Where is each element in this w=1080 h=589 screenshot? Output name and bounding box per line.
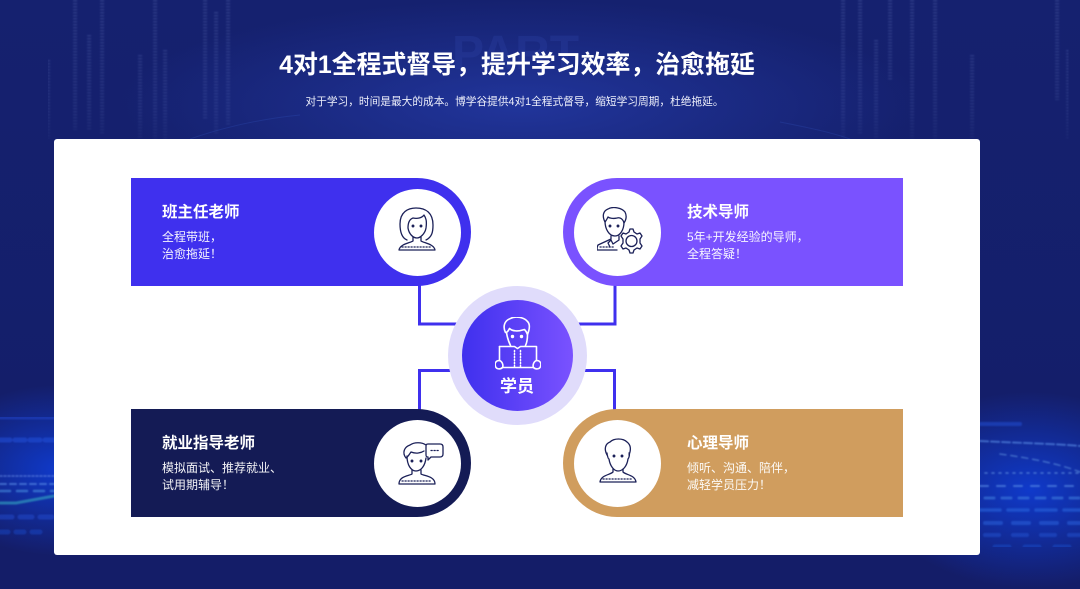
label: 学员: 学员 bbox=[500, 376, 534, 396]
text: 就业指导老师 description bbox=[162, 461, 282, 492]
icon: student reading a book bbox=[495, 317, 541, 370]
text: 技术导师 description: 5年+开发经验的导师， bbox=[687, 230, 809, 244]
heading: 技术导师: 技术导师 bbox=[687, 204, 749, 221]
card: 心理导师 bbox=[563, 409, 903, 517]
icon: man with speech bubble in white circle bbox=[374, 420, 460, 506]
panel: white content card bbox=[54, 139, 980, 555]
icon: woman in white circle bbox=[374, 188, 460, 276]
icon: man with gear in white circle bbox=[574, 188, 660, 276]
text: 就业指导老师 description: 试用期辅导！ bbox=[162, 478, 234, 492]
inner gradient circle bbox=[462, 300, 572, 410]
heading: 班主任老师: 班主任老师 bbox=[162, 204, 240, 221]
heading: 就业指导老师: 就业指导老师 bbox=[162, 435, 255, 452]
text: 就业指导老师 description: 模拟面试、推荐就业、 bbox=[162, 461, 282, 475]
text: 班主任老师 description bbox=[162, 230, 222, 261]
card: 就业指导老师 bbox=[131, 409, 471, 517]
card: 技术导师 bbox=[563, 178, 903, 286]
text: 班主任老师 description: 治愈拖延！ bbox=[162, 247, 222, 261]
center node: 学员 bbox=[448, 286, 586, 424]
ghost watermark: PART: PART bbox=[452, 27, 579, 80]
text: 心理导师 description: 减轻学员压力！ bbox=[687, 478, 771, 492]
text: 班主任老师 description: 全程带班， bbox=[162, 230, 222, 244]
text: 技术导师 description: 全程答疑！ bbox=[687, 247, 747, 261]
text: 心理导师 description: 倾听、沟通、陪伴， bbox=[687, 461, 795, 475]
icon: person in white circle bbox=[574, 420, 660, 506]
text: 技术导师 description bbox=[687, 230, 809, 261]
subtitle: 对于学习，时间是最大的成本。博学谷提供4对1全程式督导，缩短学习周期，杜绝拖延。 bbox=[305, 96, 724, 108]
text: 心理导师 description bbox=[687, 461, 795, 492]
title: 4对1全程式督导，提升学习效率，治愈拖延 bbox=[279, 51, 755, 79]
heading: 心理导师: 心理导师 bbox=[687, 435, 749, 452]
card: 班主任老师 bbox=[131, 178, 471, 286]
